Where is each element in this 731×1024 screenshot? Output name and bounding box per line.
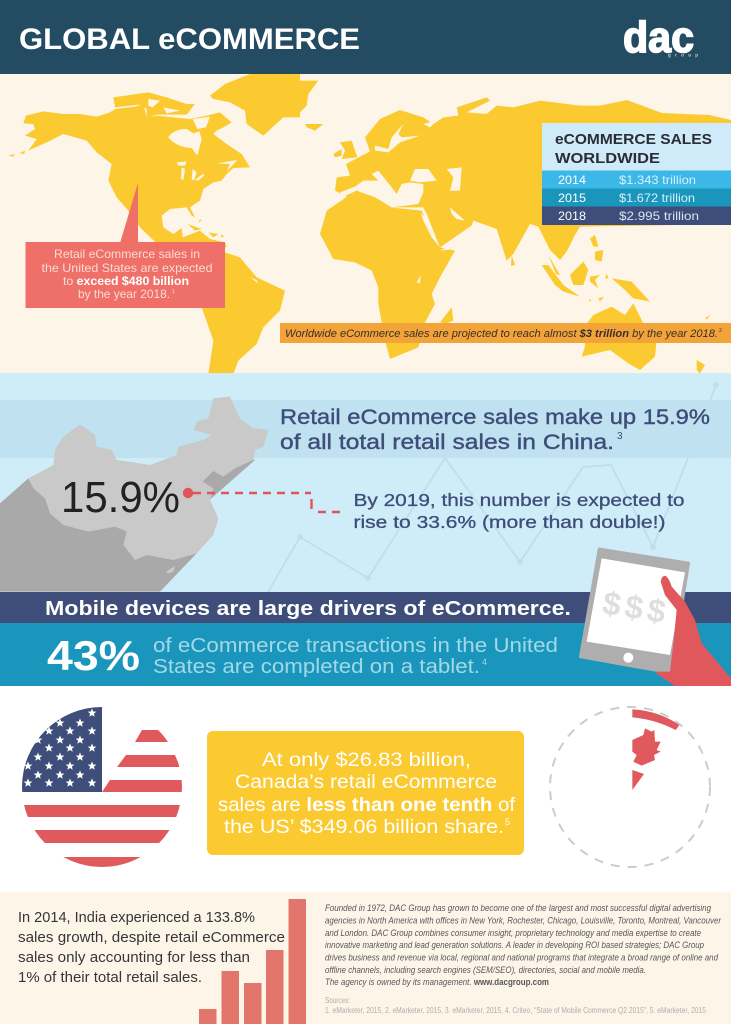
map: seas and lakes xyxy=(148,99,465,283)
tablet statistic text: of eCommerce transactions in the United xyxy=(153,635,558,657)
India text: In 2014, India experienced a 133.8% xyxy=(18,909,255,926)
China heading xyxy=(280,406,710,454)
China heading: of all total retail sales in China. xyxy=(280,431,614,454)
sources xyxy=(325,996,706,1015)
icon: US flag circle xyxy=(22,707,182,868)
panel: mobile devices xyxy=(0,549,731,687)
icon: Canada flag circle xyxy=(550,707,710,867)
title: GLOBAL eCOMMERCE xyxy=(19,23,360,56)
map: Eurasia and Africa xyxy=(300,81,731,359)
callout: Canada sales: 5 xyxy=(505,817,510,827)
table row 2015 xyxy=(542,188,731,206)
callout: United States sales: Retail eCommerce sales in xyxy=(54,247,200,261)
faint line chart xyxy=(268,383,718,592)
callout: United States sales xyxy=(26,183,225,308)
logo: dac group: group xyxy=(668,52,698,58)
sources: Sources: xyxy=(325,996,350,1005)
table row 2018: $2.995 trillion xyxy=(619,209,699,223)
China heading: Retail eCommerce sales make up 15.9% xyxy=(280,406,710,429)
DAC Group description xyxy=(325,902,722,987)
table row 2014 xyxy=(542,170,731,188)
panel: eCommerce sales worldwide table xyxy=(542,123,731,225)
table heading: eCOMMERCE SALES xyxy=(555,131,712,148)
India text xyxy=(18,909,285,986)
icon: tablet and hand: $$$ xyxy=(600,584,668,630)
panel: footer xyxy=(0,892,731,1024)
China map xyxy=(28,397,268,573)
callout: United States sales: 1 xyxy=(172,289,175,295)
India text: sales growth, despite retail eCommerce xyxy=(18,929,285,946)
tablet statistic text: 4 xyxy=(482,657,487,667)
China heading: 3 xyxy=(617,431,623,442)
panel: world map xyxy=(0,74,731,374)
China forecast text: rise to 33.6% (more than double!) xyxy=(354,512,666,532)
callout: United States sales: by the year 2018. xyxy=(78,287,170,301)
mobile heading: Mobile devices are large drivers of eCommerce. xyxy=(45,597,571,620)
callout: Canada sales: At only $26.83 billion, xyxy=(262,749,471,771)
dashed connector xyxy=(183,488,345,512)
table row 2018: 2018 xyxy=(558,209,586,223)
China share figure: 15.9% xyxy=(61,473,180,522)
table heading xyxy=(555,131,712,167)
callout: United States sales: the United States are expected xyxy=(42,261,212,275)
banner: worldwide projection: Worldwide eCommerce sales are projected to reach almost $3 trillion by the year 2018. xyxy=(285,328,718,340)
China map shadow xyxy=(0,452,255,592)
panel: China xyxy=(0,373,731,592)
panel: US and Canada comparison xyxy=(22,686,731,868)
icon: tablet and hand xyxy=(581,549,731,687)
logo: dac group: dac xyxy=(623,13,694,62)
header band xyxy=(0,0,731,74)
table row 2015: $1.672 trillion xyxy=(619,191,695,205)
callout: Canada sales: sales are less than one tenth of xyxy=(218,794,516,816)
table row 2014: 2014 xyxy=(558,173,586,187)
DAC Group description: The agency is owned by its management. www.dacgroup.com xyxy=(325,976,549,987)
tablet statistic text: States are completed on a tablet. xyxy=(153,656,480,678)
table row 2014: $1.343 trillion xyxy=(619,173,696,187)
callout: Canada sales xyxy=(207,731,524,855)
map: Americas and Greenland xyxy=(8,74,300,374)
China forecast text: By 2019, this number is expected to xyxy=(354,490,684,510)
India text: 1% of their total retail sales. xyxy=(18,969,202,986)
callout: Canada sales: Canada’s retail eCommerce xyxy=(235,771,497,793)
China forecast text xyxy=(354,490,684,532)
banner: worldwide projection: 2 xyxy=(719,328,722,334)
bar chart: India growth xyxy=(199,899,306,1024)
callout: Canada sales: the US’ $349.06 billion share. xyxy=(224,816,504,838)
India text: sales only accounting for less than xyxy=(18,949,250,966)
table row 2018 xyxy=(542,206,731,225)
table heading: WORLDWIDE xyxy=(555,150,660,167)
map: Southeast Asia and Oceania xyxy=(511,228,710,373)
tablet statistic text xyxy=(153,635,558,678)
DAC Group description: offline channels, including search engines (SEM/SEO), directories, social and mobile media. xyxy=(325,964,646,975)
callout: United States sales: to exceed $480 billion xyxy=(63,274,189,288)
tablet percentage: 43% xyxy=(47,632,140,679)
banner: worldwide projection xyxy=(280,323,731,343)
table row 2015: 2015 xyxy=(558,191,586,205)
